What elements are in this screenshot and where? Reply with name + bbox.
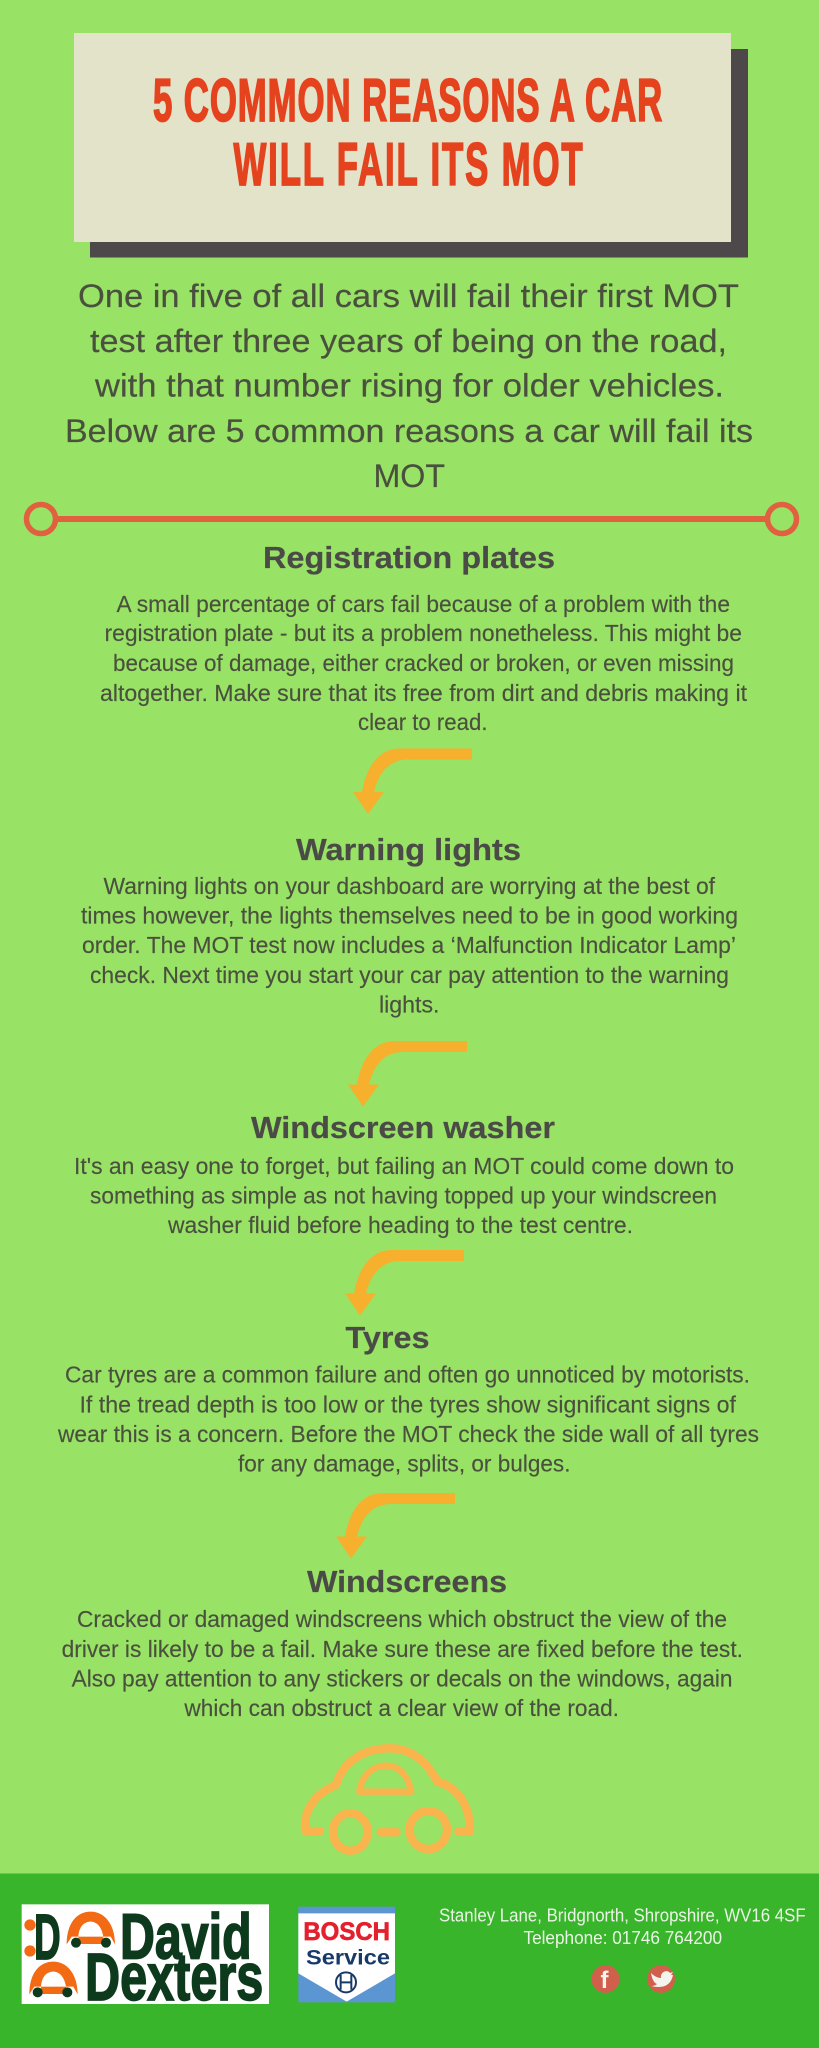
body: warning lights: lights. (379, 992, 440, 1018)
intro text: with that number rising for older vehicles. (94, 368, 724, 404)
logo: David Dexters (22, 1900, 269, 2015)
body: registration plates: registration plate - but its a problem nonetheless. This might be (104, 620, 742, 646)
body: registration plates (100, 591, 748, 735)
section: warning lights (81, 832, 738, 1018)
section: tyres (57, 1320, 759, 1477)
intro text: MOT (374, 458, 445, 494)
icon: twitter (647, 1965, 675, 1993)
footer band (0, 1874, 819, 2048)
logo: Bosch Service: Service (306, 1945, 390, 1969)
body: windscreen washer: something as simple as not having topped up your windscreen (90, 1182, 717, 1208)
intro text: test after three years of being on the road, (90, 323, 727, 359)
logo: David Dexters: David (120, 1900, 252, 1972)
body: windscreens: Cracked or damaged windscreens which obstruct the view of the (77, 1606, 727, 1632)
body: registration plates: clear to read. (358, 709, 488, 735)
title: 5 COMMON REASONS A CAR (153, 68, 662, 134)
body: windscreens: which can obstruct a clear view of the road. (183, 1695, 619, 1721)
contact details: Telephone: 01746 764200 (524, 1928, 722, 1948)
body: warning lights (81, 873, 738, 1018)
body: registration plates: altogether. Make sure that its free from dirt and debris making it (100, 680, 748, 706)
arrow 2 (348, 1041, 467, 1106)
body: tyres: for any damage, splits, or bulges. (238, 1451, 570, 1477)
arrow 3 (345, 1250, 464, 1316)
intro text (65, 278, 753, 494)
intro text: Below are 5 common reasons a car will fail its (65, 413, 753, 449)
heading: windscreen washer: Windscreen washer (251, 1110, 555, 1145)
body: tyres: If the tread depth is too low or the tyres show significant signs of (80, 1392, 737, 1418)
logo: Bosch Service (298, 1907, 395, 2002)
body: warning lights: times however, the lights themselves need to be in good working (81, 903, 738, 929)
heading: windscreens: Windscreens (307, 1564, 507, 1599)
title (153, 68, 662, 198)
body: tyres: wear this is a concern. Before the MOT check the side wall of all tyres (57, 1421, 759, 1447)
body: windscreen washer (74, 1153, 734, 1238)
icon: facebook (592, 1965, 620, 1994)
arrow 4 (336, 1493, 455, 1558)
body: warning lights: Warning lights on your dashboard are worrying at the best of (104, 873, 716, 899)
body: windscreen washer: It's an easy one to forget, but failing an MOT could come down to (74, 1153, 734, 1179)
section: windscreens (62, 1564, 743, 1721)
title card (74, 33, 748, 258)
heading: warning lights: Warning lights (296, 832, 521, 867)
arrow 1 (353, 748, 472, 814)
section: windscreen washer (74, 1110, 734, 1238)
body: registration plates: A small percentage of cars fail because of a problem with the (116, 591, 730, 617)
body: warning lights: check. Next time you start your car pay attention to the warning (90, 962, 729, 988)
logo: David Dexters: Dexters (85, 1941, 263, 2015)
heading: tyres: Tyres (346, 1320, 430, 1355)
divider with end circles (26, 504, 796, 534)
body: windscreen washer: washer fluid before heading to the test centre. (167, 1212, 633, 1238)
body: warning lights: order. The MOT test now includes a ‘Malfunction Indicator Lamp’ (82, 932, 736, 958)
body: windscreens: Also pay attention to any stickers or decals on the windows, again (72, 1666, 733, 1692)
intro text: One in five of all cars will fail their first MOT (78, 278, 739, 314)
body: tyres: Car tyres are a common failure and often go unnoticed by motorists. (65, 1362, 750, 1388)
logo: David Dexters: D (34, 1901, 61, 1973)
body: windscreens: driver is likely to be a fail. Make sure these are fixed before the test. (62, 1636, 743, 1662)
section: registration plates (100, 540, 748, 735)
icon: facebook: f (600, 1967, 610, 1994)
icon: car outline (305, 1748, 470, 1851)
logo: Bosch Service: BOSCH (303, 1918, 390, 1946)
title: WILL FAIL ITS MOT (234, 132, 583, 198)
heading: registration plates: Registration plates (263, 540, 555, 575)
body: tyres (57, 1362, 759, 1477)
contact details (439, 1906, 806, 1948)
body: windscreens (62, 1606, 743, 1721)
body: registration plates: because of damage, either cracked or broken, or even missing (113, 650, 734, 676)
